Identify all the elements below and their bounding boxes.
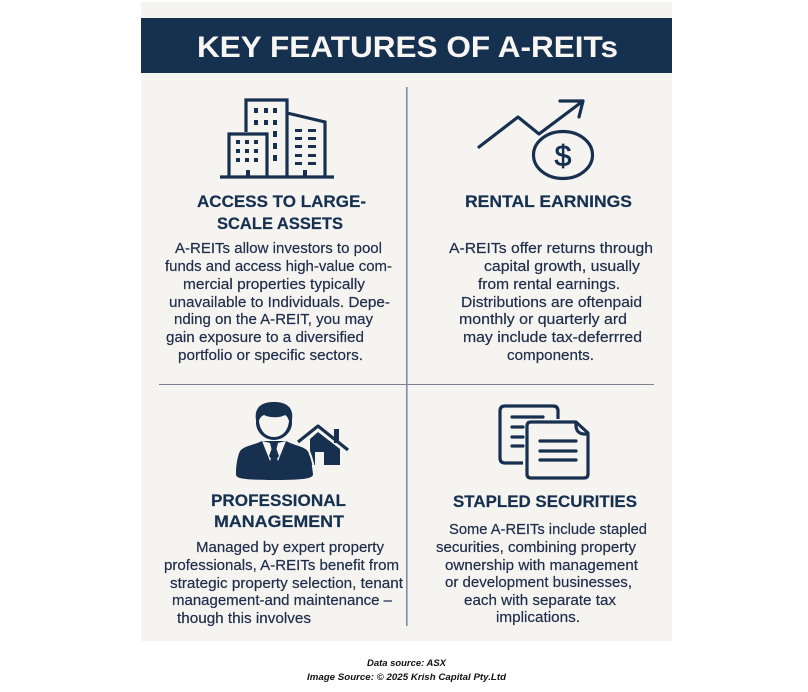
heading: access to large-scale assets	[197, 192, 366, 233]
text block: professional management: professionals, A-REITs benefit from	[164, 558, 399, 574]
panel: access to large-scale assets	[165, 100, 392, 364]
text block: access to large-scale assets: gain exposure to a diversified	[166, 330, 364, 346]
text block: access to large-scale assets: nding on the A-REIT, you may	[174, 312, 374, 328]
text block: rental earnings: A-REITs offer returns through	[449, 241, 653, 257]
text block: rental earnings: capital growth, usually	[484, 259, 641, 275]
text block: professional management: management-and maintenance –	[172, 593, 393, 609]
text block: access to large-scale assets	[165, 241, 392, 364]
heading: professional management: PROFESSIONAL	[211, 491, 346, 510]
source footer: Image Source: © 2025 Krish Capital Pty.Ltd	[307, 672, 506, 683]
panel: rental earnings	[449, 101, 653, 364]
icon: rising arrow and dollar coin: $	[555, 140, 572, 173]
text block: access to large-scale assets: funds and access high-value com-	[165, 259, 392, 275]
text block: rental earnings: may include tax-deferrred	[463, 330, 642, 346]
icon: rising arrow and dollar coin	[479, 101, 592, 178]
source footer: Data source: ASX	[367, 658, 447, 669]
text block: rental earnings: components.	[507, 348, 594, 364]
text block: stapled securities: securities, combining property	[436, 540, 637, 556]
text block: rental earnings: Distributions are oftenpaid	[461, 295, 642, 311]
text block: professional management	[164, 540, 403, 627]
heading: professional management	[211, 491, 346, 531]
text block: access to large-scale assets: portfolio or specific sectors.	[178, 348, 363, 364]
text block: rental earnings: monthly or quarterly ard	[459, 312, 627, 328]
panel: professional management	[164, 402, 403, 627]
heading: professional management: MANAGEMENT	[214, 512, 345, 531]
source footer	[307, 658, 506, 683]
text block: stapled securities: each with separate tax	[464, 593, 617, 609]
panel: stapled securities	[436, 406, 647, 626]
title banner	[141, 18, 672, 73]
text block: stapled securities: or development businesses,	[445, 575, 632, 591]
icon: office buildings	[220, 100, 334, 177]
icon: manager and house	[236, 402, 348, 480]
icon: stacked documents	[500, 406, 588, 478]
heading: rental earnings: RENTAL EARNINGS	[465, 192, 632, 211]
panel: background	[141, 2, 672, 641]
text block: professional management: Managed by expert property	[196, 540, 385, 556]
text block: access to large-scale assets: mercial properties typically	[183, 277, 366, 293]
text block: stapled securities: Some A-REITs include stapled	[449, 522, 647, 538]
text block: stapled securities	[436, 522, 647, 626]
heading: access to large-scale assets: ACCESS TO LARGE-	[197, 192, 366, 211]
text block: rental earnings: from rental earnings.	[478, 277, 620, 293]
title: KEY FEATURES OF A-REITs	[197, 31, 618, 64]
text block: professional management: strategic property selection, tenant	[170, 576, 403, 592]
text block: stapled securities: ownership with management	[445, 558, 638, 574]
text block: stapled securities: implications.	[496, 610, 580, 626]
text block: access to large-scale assets: A-REITs allow investors to pool	[175, 241, 382, 257]
heading: access to large-scale assets: SCALE ASSETS	[217, 214, 343, 233]
text block: access to large-scale assets: unavailable to Individuals. Depe-	[169, 295, 390, 311]
text block: professional management: though this involves	[177, 611, 311, 627]
text block: rental earnings	[449, 241, 653, 364]
heading: stapled securities: STAPLED SECURITIES	[453, 492, 637, 511]
